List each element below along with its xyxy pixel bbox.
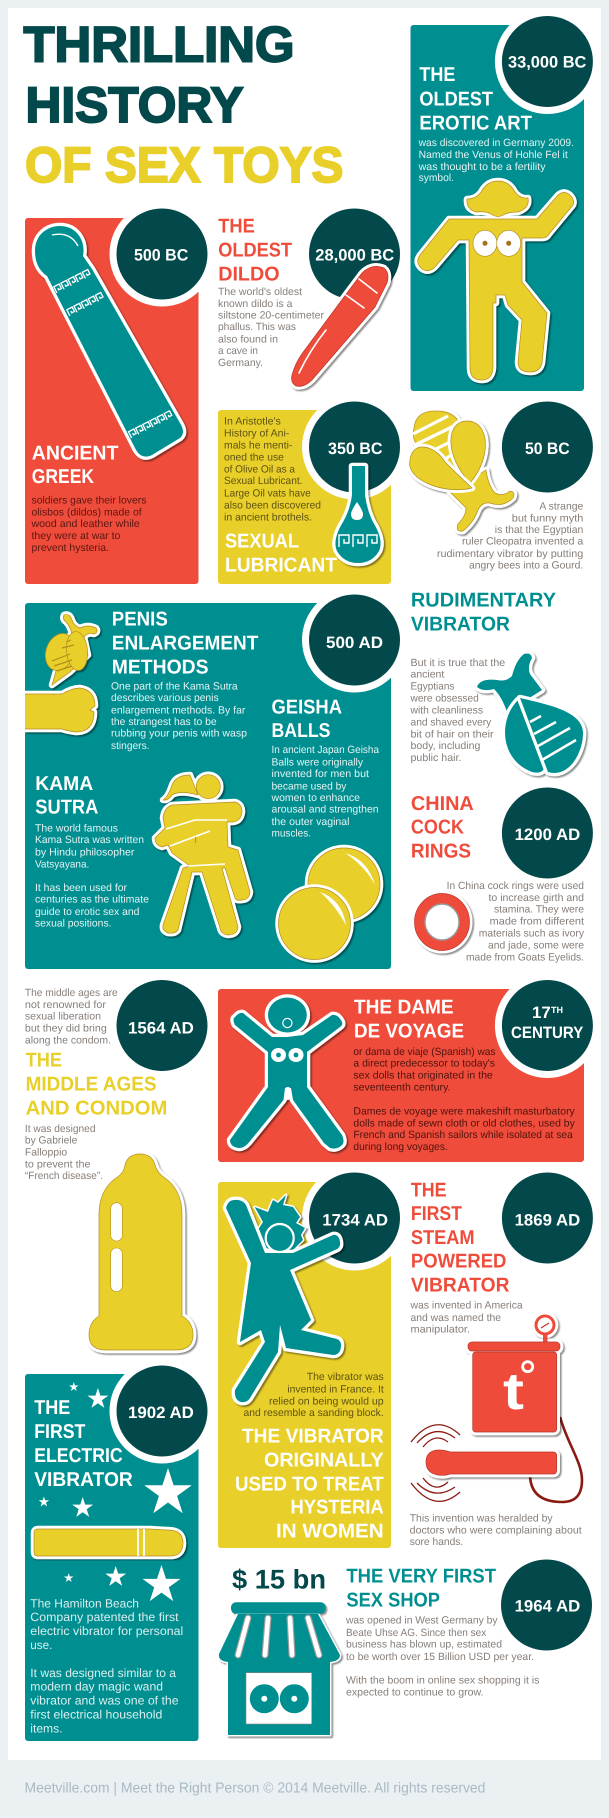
text: hamilton beach description bbox=[30, 1597, 183, 1735]
text: penis enlargement description: rubbing your penis with wasp bbox=[111, 728, 247, 740]
text: cleopatra myth: is that the Egyptian bbox=[495, 524, 583, 536]
heading: rudimentary vibrator: RUDIMENTARY bbox=[411, 590, 557, 612]
text: manipulator: and was named the bbox=[410, 1312, 501, 1324]
text: geisha balls description: women to enhance bbox=[271, 792, 360, 804]
date badge: 1964 AD: 1964 AD bbox=[515, 1598, 580, 1616]
text: penis enlargement description: describes various penis bbox=[111, 692, 219, 704]
text: condom description: It was designed bbox=[25, 1123, 96, 1135]
heading: the first electric vibrator bbox=[34, 1397, 133, 1491]
text: dame de voyage description bbox=[353, 1046, 576, 1153]
date badge: 350 BC bbox=[302, 394, 407, 500]
date badge: 50 BC: 50 BC bbox=[525, 440, 570, 458]
heading: the dame de voyage: THE DAME bbox=[354, 997, 454, 1019]
text: penis enlargement description: stingers. bbox=[111, 740, 150, 752]
text: cock rings description: made from different bbox=[490, 915, 584, 927]
text: dame de voyage description: a direct predecessor to today's bbox=[353, 1058, 495, 1070]
text: middle ages intro: not renowned for bbox=[25, 999, 107, 1011]
heading: the middle ages and condom: MIDDLE AGES bbox=[26, 1074, 156, 1096]
text: oldest dildo description: a cave in bbox=[218, 345, 258, 357]
text: oldest dildo description: known dildo is a bbox=[218, 298, 293, 310]
text: greek description: prevent hysteria. bbox=[32, 542, 109, 554]
text: lubricant description: of Olive Oil as a bbox=[224, 463, 295, 475]
text: cock rings description: made from Goats Eyelids. bbox=[466, 952, 584, 964]
date badge: 1734 AD: 1734 AD bbox=[322, 1212, 388, 1230]
text: egyptians hair: and shaved every bbox=[410, 717, 492, 729]
text: sex shop description: business has blown up, estimated bbox=[346, 1639, 502, 1651]
text: cock rings description: materials such as ivory bbox=[479, 928, 585, 940]
text: erotic art description bbox=[418, 137, 574, 184]
date badge: 33,000 BC bbox=[495, 9, 600, 114]
icon: red ring bbox=[412, 890, 472, 954]
text: geisha balls description: invented for men but bbox=[272, 768, 369, 780]
icon: steam vibrator machine bbox=[411, 1315, 582, 1502]
date badge: 17th century: TH bbox=[551, 1005, 563, 1015]
heading: kama sutra: KAMA bbox=[35, 773, 93, 795]
text: sex shop description: Beate Uhse AG. Since then sex bbox=[346, 1627, 487, 1639]
figure: $ 15 bn: $ 15 bn bbox=[232, 1564, 326, 1594]
text: lubricant description: in ancient brothels. bbox=[224, 511, 312, 523]
heading: the middle ages and condom bbox=[26, 1050, 167, 1120]
heading: china cock rings: COCK bbox=[411, 817, 464, 839]
text: dame de voyage description: during long voyages. bbox=[353, 1141, 448, 1153]
icon: teal bee bbox=[477, 654, 583, 773]
text: egyptians hair: ancient bbox=[410, 669, 444, 681]
section: oldest dildo bbox=[218, 208, 400, 386]
text: cleopatra myth bbox=[437, 500, 583, 572]
text: egyptians hair: But it is true that the bbox=[410, 657, 505, 669]
text: dame de voyage description: dolls made of sewn cloth or old clothes, used by bbox=[353, 1117, 576, 1129]
section: oldest erotic art bbox=[410, 9, 600, 391]
text: erotic art description: symbol. bbox=[419, 172, 454, 184]
section: china cock rings bbox=[411, 788, 593, 964]
text: penis enlargement description: enlargement methods. By far bbox=[111, 704, 246, 716]
section: first electric vibrator bbox=[25, 1358, 214, 1741]
date badge: 17th century: CENTURY bbox=[511, 1024, 583, 1042]
date badge: 17th century: 17 bbox=[532, 1004, 551, 1022]
text: cock rings description: stamina. They were bbox=[494, 904, 584, 916]
icon: oil bottle bbox=[335, 466, 381, 563]
text: geisha balls description bbox=[271, 744, 379, 840]
heading: the vibrator originally used to treat hysteria in women: ORIGINALLY bbox=[264, 1449, 384, 1471]
text: cock rings description bbox=[447, 880, 585, 964]
icon: condom bbox=[89, 1154, 193, 1350]
text: cleopatra myth: ruler Cleopatra invented a bbox=[462, 536, 583, 548]
heading: the oldest erotic art: OLDEST bbox=[419, 88, 493, 110]
date badge: 1564 AD: 1564 AD bbox=[128, 1019, 194, 1037]
text: geisha balls description: arousal and strengthen bbox=[272, 804, 379, 816]
heading: the first electric vibrator: FIRST bbox=[34, 1421, 85, 1443]
icon: venus figure bbox=[418, 181, 574, 380]
title: OF SEX TOYS bbox=[25, 137, 344, 193]
text: oldest dildo description: The world's oldest bbox=[218, 286, 302, 298]
heading: first steam powered vibrator: THE bbox=[411, 1180, 447, 1202]
text: sore hands: This invention was heralded by bbox=[410, 1513, 553, 1525]
text: kama sutra description: guide to erotic sex and bbox=[35, 906, 140, 918]
date badge: 50 BC bbox=[502, 402, 593, 492]
text: lubricant description: History of Ani- bbox=[224, 428, 290, 440]
heading: the vibrator originally used to treat hysteria in women bbox=[235, 1425, 384, 1543]
date badge: 28,000 BC: 28,000 BC bbox=[315, 247, 394, 265]
date badge: 1200 AD bbox=[502, 788, 593, 878]
text: greek description: they were at war to bbox=[32, 530, 121, 542]
heading: geisha balls: BALLS bbox=[272, 720, 330, 742]
text: middle ages intro: The middle ages are bbox=[25, 987, 118, 999]
date badge: 1869 AD bbox=[502, 1172, 593, 1264]
heading: geisha balls: GEISHA bbox=[272, 696, 342, 718]
text: sore hands bbox=[410, 1513, 582, 1548]
date badge: 33,000 BC: 33,000 BC bbox=[508, 53, 586, 71]
text: dame de voyage description: seventeenth century. bbox=[353, 1082, 450, 1094]
text: oldest dildo description: phallus. This was bbox=[218, 321, 296, 333]
text: hamilton beach description: modern day magic wand bbox=[30, 1680, 163, 1694]
heading: the middle ages and condom: THE bbox=[26, 1050, 62, 1072]
date badge: 500 AD: 500 AD bbox=[326, 634, 383, 652]
heading: first steam powered vibrator bbox=[411, 1180, 510, 1297]
text: greek description: soldiers gave their lovers bbox=[32, 494, 146, 506]
text: hamilton beach description: vibrator and was one of the bbox=[30, 1693, 179, 1707]
text: greek description: olisbos (dildos) made of bbox=[32, 506, 142, 518]
icon: wasp bbox=[40, 615, 97, 685]
text: manipulator bbox=[410, 1299, 523, 1336]
heading: sexual lubricant: LUBRICANT bbox=[225, 555, 337, 577]
date badge: 350 BC: 350 BC bbox=[328, 440, 383, 458]
text: geisha balls description: the outer vaginal bbox=[272, 816, 350, 828]
icon: yellow bee bbox=[410, 411, 514, 531]
text: egyptians hair: bit of hair on their bbox=[410, 728, 494, 740]
text: dame de voyage description: Dames de voyage were makeshift masturbatory bbox=[353, 1106, 576, 1118]
text: geisha balls description: became used by bbox=[272, 780, 347, 792]
heading: ancient greek: ANCIENT bbox=[32, 442, 118, 464]
text: oldest dildo description: Germany. bbox=[218, 357, 263, 369]
heading: first steam powered vibrator: FIRST bbox=[411, 1203, 462, 1225]
text: kama sutra description: It has been used for bbox=[35, 882, 127, 894]
text: condom description bbox=[25, 1123, 103, 1182]
section: sexual lubricant bbox=[218, 394, 407, 584]
text: dame de voyage description: sex dolls that originated in the bbox=[353, 1069, 493, 1081]
text: sex shop description bbox=[345, 1614, 539, 1699]
text: egyptians hair bbox=[410, 657, 505, 764]
text: erotic art description: Named the Venus of Hohle Fel it bbox=[419, 149, 568, 161]
text: kama sutra description: sexual positions. bbox=[35, 918, 112, 930]
text: kama sutra description: The world famous bbox=[35, 822, 118, 834]
heading: the oldest dildo bbox=[218, 215, 292, 286]
heading: the oldest dildo: THE bbox=[218, 215, 255, 237]
heading: first steam powered vibrator: VIBRATOR bbox=[411, 1275, 510, 1297]
text: egyptians hair: body, including bbox=[410, 740, 481, 752]
heading: the first electric vibrator: VIBRATOR bbox=[34, 1469, 133, 1491]
icon: penis shape bbox=[15, 688, 95, 732]
section: kama sutra panel bbox=[15, 588, 407, 969]
text: hamilton beach description: Company patented the first bbox=[30, 1610, 179, 1624]
heading: sexual lubricant bbox=[225, 530, 337, 577]
text: hysteria description: relied on being would up bbox=[269, 1395, 384, 1407]
text: hamilton beach description: The Hamilton Beach bbox=[30, 1597, 139, 1611]
heading: kama sutra bbox=[35, 773, 98, 819]
date badge: 28,000 BC bbox=[309, 208, 400, 300]
heading: geisha balls bbox=[272, 696, 342, 742]
text: kama sutra description: centuries as the ultimate bbox=[35, 894, 149, 906]
date badge: 500 BC: 500 BC bbox=[134, 247, 188, 265]
text: kama sutra description bbox=[35, 822, 149, 930]
title bbox=[24, 16, 344, 193]
text: greek description bbox=[30, 494, 146, 554]
text: hamilton beach description: items. bbox=[30, 1721, 62, 1735]
heading: first steam powered vibrator: STEAM bbox=[411, 1227, 475, 1249]
text: oldest dildo description: also found in bbox=[218, 333, 278, 345]
text: condom description: to prevent the bbox=[25, 1159, 91, 1171]
panel: dame de voyage bbox=[218, 989, 584, 1162]
text: sore hands: doctors who were complaining about bbox=[410, 1524, 582, 1536]
text: penis enlargement description bbox=[111, 680, 247, 752]
icon: steam vibrator machine: t bbox=[503, 1363, 524, 1421]
heading: the vibrator originally used to treat hysteria in women: USED TO TREAT bbox=[235, 1473, 384, 1495]
text: lubricant description bbox=[224, 415, 321, 523]
heading: rudimentary vibrator: VIBRATOR bbox=[411, 614, 511, 636]
date badge: 17th century bbox=[495, 973, 600, 1078]
heading: penis enlargement methods: PENIS bbox=[112, 609, 168, 631]
heading: the oldest erotic art bbox=[419, 64, 532, 134]
section: first sex shop bbox=[219, 1560, 592, 1735]
text: hamilton beach description: use. bbox=[30, 1638, 52, 1652]
heading: the very first sex shop bbox=[346, 1565, 496, 1611]
text: hysteria description: and resemble a sanding block. bbox=[244, 1407, 384, 1419]
text: greek description: wood and leather while bbox=[30, 518, 140, 530]
date badge: 1964 AD bbox=[501, 1560, 592, 1650]
text: penis enlargement description: the strangest has to be bbox=[111, 716, 217, 728]
panel: kama sutra bbox=[25, 603, 391, 969]
heading: kama sutra: SUTRA bbox=[35, 797, 98, 819]
text: sex shop description: expected to continue to grow. bbox=[346, 1687, 484, 1699]
title: THRILLING bbox=[24, 16, 294, 72]
text: cock rings description: to increase girth and bbox=[488, 892, 584, 904]
text: cleopatra myth: angry bees into a Gourd. bbox=[469, 560, 583, 572]
heading: the dame de voyage bbox=[354, 997, 464, 1043]
text: manipulator: manipulator. bbox=[410, 1324, 470, 1336]
text: penis enlargement description: One part of the Kama Sutra bbox=[111, 680, 238, 692]
text: hysteria description bbox=[244, 1371, 384, 1419]
date badge: 500 AD bbox=[302, 588, 407, 692]
text: cock rings description: and jade, some were bbox=[488, 939, 584, 951]
text: geisha balls description: In ancient Japan Geisha bbox=[272, 744, 379, 756]
section: dame de voyage bbox=[218, 973, 600, 1162]
heading: penis enlargement methods: METHODS bbox=[112, 657, 208, 679]
text: dame de voyage description: or dama de viaje (Spanish) was bbox=[353, 1046, 496, 1058]
text: sex shop description: was opened in West Germany by bbox=[345, 1614, 498, 1626]
heading: the vibrator originally used to treat hysteria in women: HYSTERIA bbox=[290, 1496, 384, 1518]
text: geisha balls description: Balls were originally bbox=[272, 756, 364, 768]
text: middle ages intro: along the condom. bbox=[25, 1034, 111, 1046]
heading: ancient greek bbox=[32, 442, 118, 488]
heading: sexual lubricant: SEXUAL bbox=[225, 530, 299, 552]
heading: the very first sex shop: SEX SHOP bbox=[346, 1589, 440, 1611]
text: sex shop description: With the boom in online sex shopping it is bbox=[346, 1674, 539, 1686]
text: geisha balls description: muscles. bbox=[272, 828, 311, 840]
heading: penis enlargement methods: ENLARGEMENT bbox=[112, 633, 258, 655]
section: vibrator for hysteria bbox=[218, 1166, 407, 1548]
section: rudimentary vibrator, 50 BC bbox=[410, 402, 593, 773]
panel: hysteria bbox=[218, 1182, 391, 1548]
text: dame de voyage description: French and Spanish sailors while isolated at sea bbox=[353, 1129, 573, 1141]
text: cock rings description: In China cock rings were used bbox=[447, 880, 584, 892]
text: condom description: Falloppio bbox=[25, 1146, 67, 1158]
section: steam powered vibrator bbox=[410, 1172, 593, 1548]
heading: the first electric vibrator: ELECTRIC bbox=[34, 1445, 123, 1467]
section: ancient greek bbox=[25, 202, 214, 584]
text: erotic art description: was discovered in Germany 2009. bbox=[418, 137, 574, 149]
title: HISTORY bbox=[26, 77, 244, 133]
heading: rudimentary vibrator bbox=[411, 590, 557, 636]
text: hysteria description: The vibrator was bbox=[307, 1371, 384, 1383]
date badge: 1734 AD bbox=[302, 1166, 407, 1270]
heading: the vibrator originally used to treat hysteria in women: THE VIBRATOR bbox=[242, 1425, 384, 1447]
text: lubricant description: mals he menti- bbox=[224, 440, 293, 452]
text: hamilton beach description: first electrical household bbox=[30, 1707, 162, 1721]
text: cleopatra myth: A strange bbox=[539, 500, 583, 512]
text: sore hands: sore hands. bbox=[410, 1536, 463, 1548]
text: hamilton beach description: It was designed similar to a bbox=[30, 1666, 176, 1680]
icon: red dildo bbox=[292, 266, 388, 386]
text: lubricant description: In Aristotle's bbox=[224, 415, 281, 427]
text: hysteria description: invented in France. It bbox=[287, 1384, 384, 1396]
icon: hysterical woman bbox=[226, 1195, 341, 1402]
date badge: 1564 AD bbox=[116, 980, 208, 1071]
text: kama sutra description: by Hindu philosopher bbox=[35, 847, 135, 859]
decorative stars bbox=[39, 1382, 192, 1601]
heading: the very first sex shop: THE VERY FIRST bbox=[346, 1565, 496, 1587]
heading: the oldest erotic art: EROTIC ART bbox=[419, 112, 532, 134]
text: hamilton beach description: electric vibrator for personal bbox=[30, 1624, 183, 1638]
text: cleopatra myth: but funny myth bbox=[512, 512, 583, 524]
text: kama sutra description: Vatsyayana. bbox=[35, 858, 89, 870]
date badge: 1902 AD: 1902 AD bbox=[128, 1404, 194, 1422]
panel: sexual lubricant bbox=[218, 410, 391, 584]
heading: the oldest dildo: OLDEST bbox=[218, 240, 292, 262]
icon: greek dildo bbox=[35, 226, 183, 457]
text: middle ages intro: but they did bring bbox=[25, 1023, 107, 1035]
heading: china cock rings: CHINA bbox=[411, 793, 474, 815]
section: middle ages and condom bbox=[25, 980, 208, 1350]
text: manipulator: was invented in America bbox=[410, 1299, 523, 1311]
panel: ancient greek bbox=[25, 218, 198, 584]
text: oldest dildo description bbox=[218, 286, 324, 369]
text: egyptians hair: Egyptians bbox=[410, 680, 454, 692]
date badge: 1902 AD bbox=[110, 1358, 214, 1464]
text: lubricant description: Sexual Lubricant. bbox=[224, 475, 302, 487]
heading: penis enlargement methods bbox=[112, 609, 258, 679]
text: middle ages intro: sexual liberation bbox=[25, 1010, 101, 1022]
date badge: 1200 AD: 1200 AD bbox=[515, 826, 580, 844]
heading: the oldest erotic art: THE bbox=[419, 64, 455, 86]
heading: first steam powered vibrator: POWERED bbox=[411, 1251, 506, 1273]
text: condom description: “French disease”. bbox=[25, 1170, 103, 1182]
text: sex shop description: to be worth over 15 Billion USD per year. bbox=[346, 1651, 534, 1663]
heading: the vibrator originally used to treat hysteria in women: IN WOMEN bbox=[276, 1521, 384, 1543]
text: lubricant description: oned the use bbox=[224, 452, 284, 464]
icon: embracing couple bbox=[155, 775, 250, 935]
heading: the dame de voyage: DE VOYAGE bbox=[354, 1021, 464, 1043]
text: egyptians hair: with cleanliness bbox=[410, 704, 483, 716]
footer: Meetville.com | Meet the Right Person © 2014 Meetville. All rights reserved bbox=[24, 1781, 485, 1797]
text: erotic art description: was thought to be a fertility bbox=[418, 161, 546, 173]
icon: geisha balls bbox=[278, 848, 380, 960]
date badge: 1869 AD: 1869 AD bbox=[515, 1212, 580, 1230]
heading: the middle ages and condom: AND CONDOM bbox=[26, 1098, 167, 1120]
heading: china cock rings bbox=[411, 793, 474, 862]
text: middle ages intro bbox=[25, 987, 118, 1046]
icon: shop bbox=[219, 1602, 340, 1735]
icon: doll figure bbox=[230, 998, 344, 1149]
panel: erotic art bbox=[410, 25, 584, 391]
heading: the first electric vibrator: THE bbox=[34, 1397, 70, 1419]
text: lubricant description: Large Oil vats have bbox=[224, 488, 311, 500]
text: lubricant description: also been discovered bbox=[224, 499, 321, 511]
text: condom description: by Gabriele bbox=[25, 1135, 77, 1147]
panel: electric vibrator bbox=[25, 1374, 198, 1741]
icon: electric vibrator wand bbox=[34, 1529, 183, 1556]
text: egyptians hair: public hair. bbox=[410, 752, 461, 764]
date badge: 500 BC bbox=[110, 202, 214, 306]
heading: ancient greek: GREEK bbox=[32, 466, 94, 488]
text: oldest dildo description: siltstone 20-centimeter bbox=[218, 309, 324, 321]
text: egyptians hair: were obsessed bbox=[410, 693, 479, 705]
text: cleopatra myth: rudimentary vibrator by putting bbox=[437, 548, 583, 560]
heading: china cock rings: RINGS bbox=[411, 840, 471, 862]
text: kama sutra description: Kama Sutra was written bbox=[35, 834, 144, 846]
heading: the oldest dildo: DILDO bbox=[218, 264, 280, 286]
